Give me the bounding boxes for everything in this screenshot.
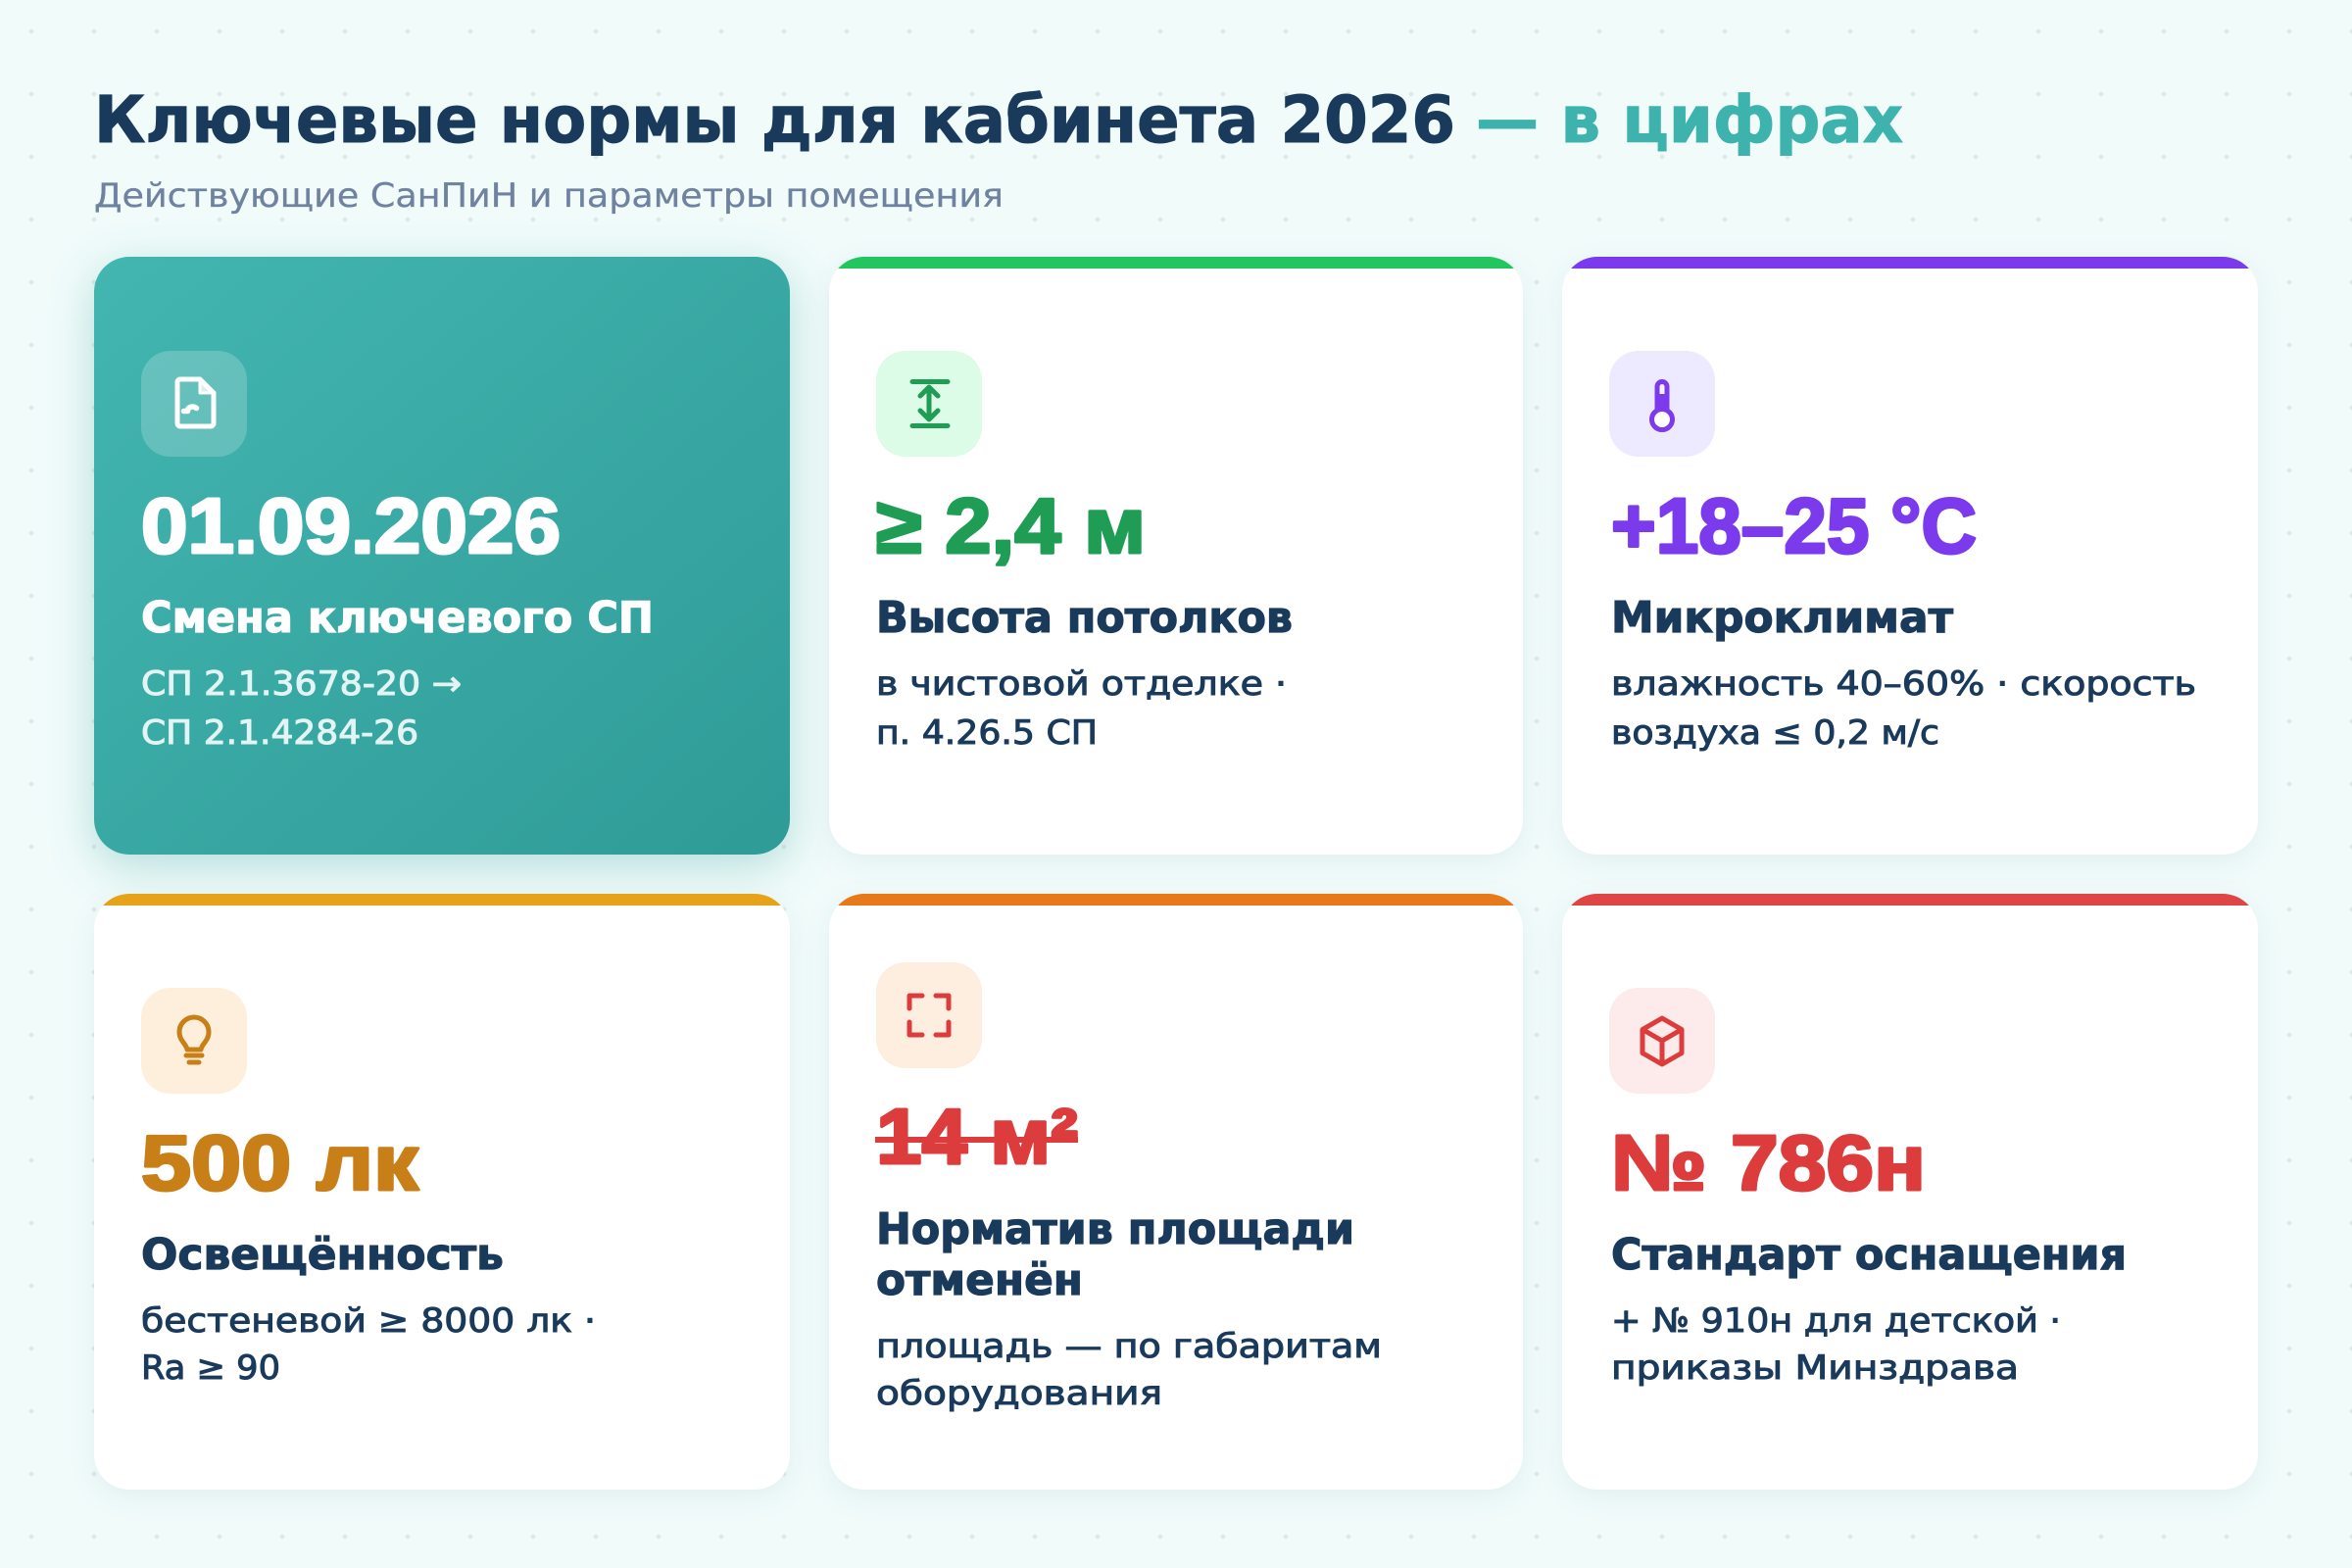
heading: Микроклимат — [1611, 593, 1953, 643]
value: 500 лк — [141, 1119, 419, 1206]
value: +18–25 °C — [1611, 482, 1977, 569]
description: воздуха ≤ 0,2 м/с — [1611, 713, 1939, 753]
description — [141, 664, 462, 753]
panel: microclimate — [1562, 257, 2258, 855]
title: Ключевые нормы для кабинета 2026 — [94, 82, 1455, 158]
icon: cube — [1609, 988, 1715, 1094]
icon: frame corners — [876, 962, 982, 1068]
panel: illumination — [94, 894, 790, 1490]
panel: date of SP change — [94, 257, 790, 855]
icon: thermometer — [1609, 351, 1715, 457]
description — [1611, 664, 2196, 753]
description: СП 2.1.4284-26 — [141, 713, 418, 753]
value: № 786н — [1611, 1119, 1926, 1206]
heading: Норматив площади — [876, 1204, 1354, 1254]
title accent: — в цифрах — [1476, 82, 1903, 158]
description: влажность 40–60% · скорость — [1611, 664, 2196, 704]
value: struck out: 14 м² — [876, 1093, 1078, 1180]
description — [876, 664, 1287, 753]
icon: height arrows — [876, 351, 982, 457]
subtitle: Действующие СанПиН и параметры помещения — [94, 176, 1004, 216]
description: площадь — по габаритам — [876, 1327, 1382, 1366]
description — [1611, 1301, 2061, 1388]
description: Ra ≥ 90 — [141, 1348, 280, 1388]
description: бестеневой ≥ 8000 лк · — [141, 1301, 596, 1341]
heading: Стандарт оснащения — [1611, 1230, 2127, 1280]
icon: light bulb — [141, 988, 247, 1094]
heading — [876, 1204, 1354, 1305]
panel: equipment standard — [1562, 894, 2258, 1490]
heading: Смена ключевого СП — [141, 593, 654, 643]
icon: document — [141, 351, 247, 457]
panel: area norm cancelled — [829, 894, 1523, 1490]
description: СП 2.1.3678-20 → — [141, 664, 462, 704]
description — [876, 1327, 1382, 1413]
description: оборудования — [876, 1374, 1162, 1413]
heading: отменён — [876, 1255, 1083, 1305]
description: п. 4.26.5 СП — [876, 713, 1098, 753]
value: 01.09.2026 — [141, 482, 561, 569]
description: приказы Минздрава — [1611, 1348, 2019, 1388]
value: ≥ 2,4 м — [876, 482, 1146, 569]
description: в чистовой отделке · — [876, 664, 1287, 704]
heading: Высота потолков — [876, 593, 1293, 643]
heading: Освещённость — [141, 1230, 504, 1280]
description: + № 910н для детской · — [1611, 1301, 2061, 1341]
panel: ceiling height — [829, 257, 1523, 855]
description — [141, 1301, 596, 1388]
